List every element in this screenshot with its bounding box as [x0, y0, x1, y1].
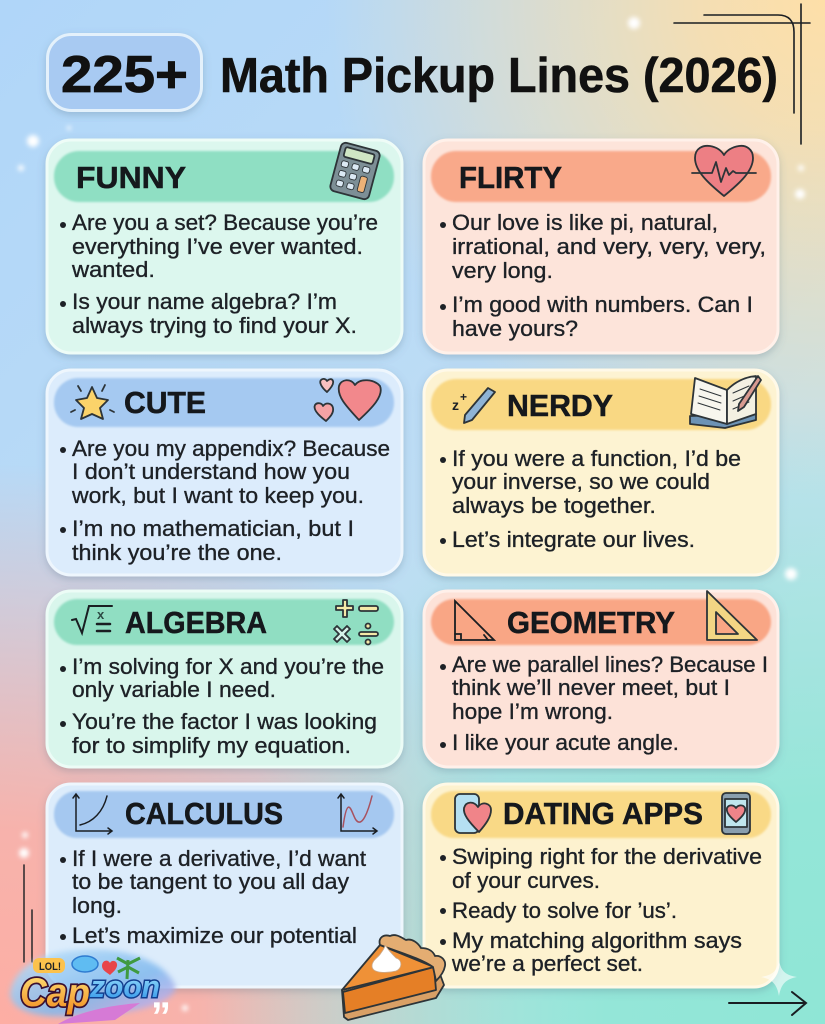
icon: square root of x — [72, 606, 112, 633]
heading: nerdy: NERDY — [507, 388, 613, 423]
list: algebra: for to simplify my equation. — [72, 733, 351, 758]
list: geometry: I like your acute angle. — [452, 730, 679, 755]
logo: Capzoon — [10, 949, 176, 1024]
panel: algebra — [47, 591, 402, 767]
list: flirty: very long. — [452, 258, 553, 283]
list: flirty: have yours? — [452, 316, 578, 341]
list: nerdy: always be together. — [452, 493, 656, 518]
list: funny: everything I’ve ever wanted. — [72, 234, 363, 259]
icon: heartbeat heart — [692, 146, 756, 196]
panel: cute — [47, 370, 402, 575]
list: calculus: If I were a derivative, I’d want — [72, 846, 366, 871]
list: funny: Are you a set? Because you’re — [72, 210, 378, 235]
list: nerdy — [440, 446, 741, 552]
panel: calculus — [47, 784, 402, 987]
header band: nerdy — [431, 379, 771, 430]
list: geometry: think we’ll never meet, but I — [452, 675, 730, 700]
logo: Capzoon: zoon — [89, 969, 160, 1004]
icon: star — [71, 385, 114, 419]
header band: algebra — [54, 599, 394, 645]
list: funny — [60, 210, 378, 338]
list: flirty — [440, 210, 766, 341]
list: calculus: Let’s maximize our potential — [72, 923, 357, 948]
list: funny: wanted. — [71, 257, 155, 282]
list: dating apps: My matching algorithm says — [452, 928, 742, 953]
list: dating apps: of your curves. — [452, 868, 600, 893]
list: geometry: Are we parallel lines? Because I — [452, 652, 768, 677]
list: cute: I’m no mathematician, but I — [72, 516, 354, 541]
heading: flirty: FLIRTY — [459, 160, 562, 195]
list: dating apps: Ready to solve for ’us’. — [452, 898, 677, 923]
list: flirty: irrational, and very, very, very, — [452, 234, 766, 259]
list: cute — [60, 436, 390, 565]
icon: pie slice — [342, 935, 445, 1020]
icon: calculator — [329, 142, 381, 200]
list: calculus: long. — [72, 893, 122, 918]
panel: geometry — [424, 591, 778, 767]
arrow — [729, 992, 806, 1015]
icon: set square — [707, 591, 757, 640]
header band: funny — [54, 151, 394, 202]
list: nerdy: Let’s integrate our lives. — [452, 527, 695, 552]
header band: geometry — [431, 599, 771, 645]
logo: Capzoon: Cap — [20, 971, 90, 1015]
heading: geometry: GEOMETRY — [507, 605, 675, 640]
heading: calculus: CALCULUS — [125, 796, 283, 831]
icon: square root of x: x — [97, 607, 105, 622]
icon: wave graph — [338, 794, 377, 834]
list: cute: I don’t understand how you — [72, 459, 350, 484]
list: nerdy: your inverse, so we could — [452, 469, 710, 494]
title badge 225+: 225+ — [61, 46, 188, 104]
icon: pencil with z+: + — [460, 390, 467, 404]
list: funny: always trying to find your X. — [72, 313, 357, 338]
list: cute: Are you my appendix? Because — [72, 436, 390, 461]
icon: curve graph — [73, 794, 112, 834]
heading: dating apps: DATING APPS — [503, 796, 703, 831]
list: funny: Is your name algebra? I’m — [72, 289, 337, 314]
list: geometry: hope I’m wrong. — [452, 699, 613, 724]
list: flirty: Our love is like pi, natural, — [452, 210, 718, 235]
icon: pencil with z+: z — [452, 397, 459, 413]
logo: Capzoon: LOL! — [39, 961, 61, 973]
list: algebra: I’m solving for X and you’re the — [72, 654, 384, 679]
icon: math operators — [334, 600, 378, 644]
title badge 225+ — [48, 34, 202, 110]
panel: dating apps — [424, 784, 778, 987]
header band: calculus — [54, 791, 394, 838]
list: flirty: I’m good with numbers. Can I — [452, 292, 753, 317]
heading: cute: CUTE — [124, 385, 206, 420]
panel: funny — [47, 140, 402, 353]
list: cute: work, but I want to keep you. — [71, 483, 364, 508]
panel: nerdy — [424, 370, 778, 575]
list: calculus — [60, 846, 366, 948]
icon: right triangle — [455, 601, 494, 640]
list: dating apps: Swiping right for the derivative — [452, 844, 762, 869]
list: algebra: You’re the factor I was looking — [72, 709, 377, 734]
panel: flirty — [424, 140, 778, 353]
icon: hearts — [315, 379, 381, 421]
icon: open book — [690, 376, 761, 428]
list: algebra — [60, 654, 384, 758]
header band: cute — [54, 378, 394, 427]
list: geometry — [440, 652, 768, 755]
header band: flirty — [431, 151, 771, 202]
decorative corner lines top right — [674, 4, 810, 144]
list: cute: think you’re the one. — [72, 540, 282, 565]
title: Math Pickup Lines (2026) — [220, 49, 778, 103]
icon: phone with heart left — [455, 794, 491, 833]
list: dating apps: we’re a perfect set. — [451, 951, 643, 976]
list: calculus: to be tangent to you all day — [72, 869, 349, 894]
heading: algebra: ALGEBRA — [125, 605, 267, 640]
list: algebra: only variable I need. — [72, 677, 276, 702]
icon: phone with heart right — [722, 793, 750, 834]
list: dating apps — [440, 844, 762, 976]
left decorative lines — [24, 865, 32, 962]
header band: dating apps — [431, 791, 771, 838]
sparkle star — [761, 960, 797, 996]
list: nerdy: If you were a function, I’d be — [452, 446, 741, 471]
heading: funny: FUNNY — [76, 160, 186, 195]
icon: pencil with z+ — [452, 388, 495, 423]
